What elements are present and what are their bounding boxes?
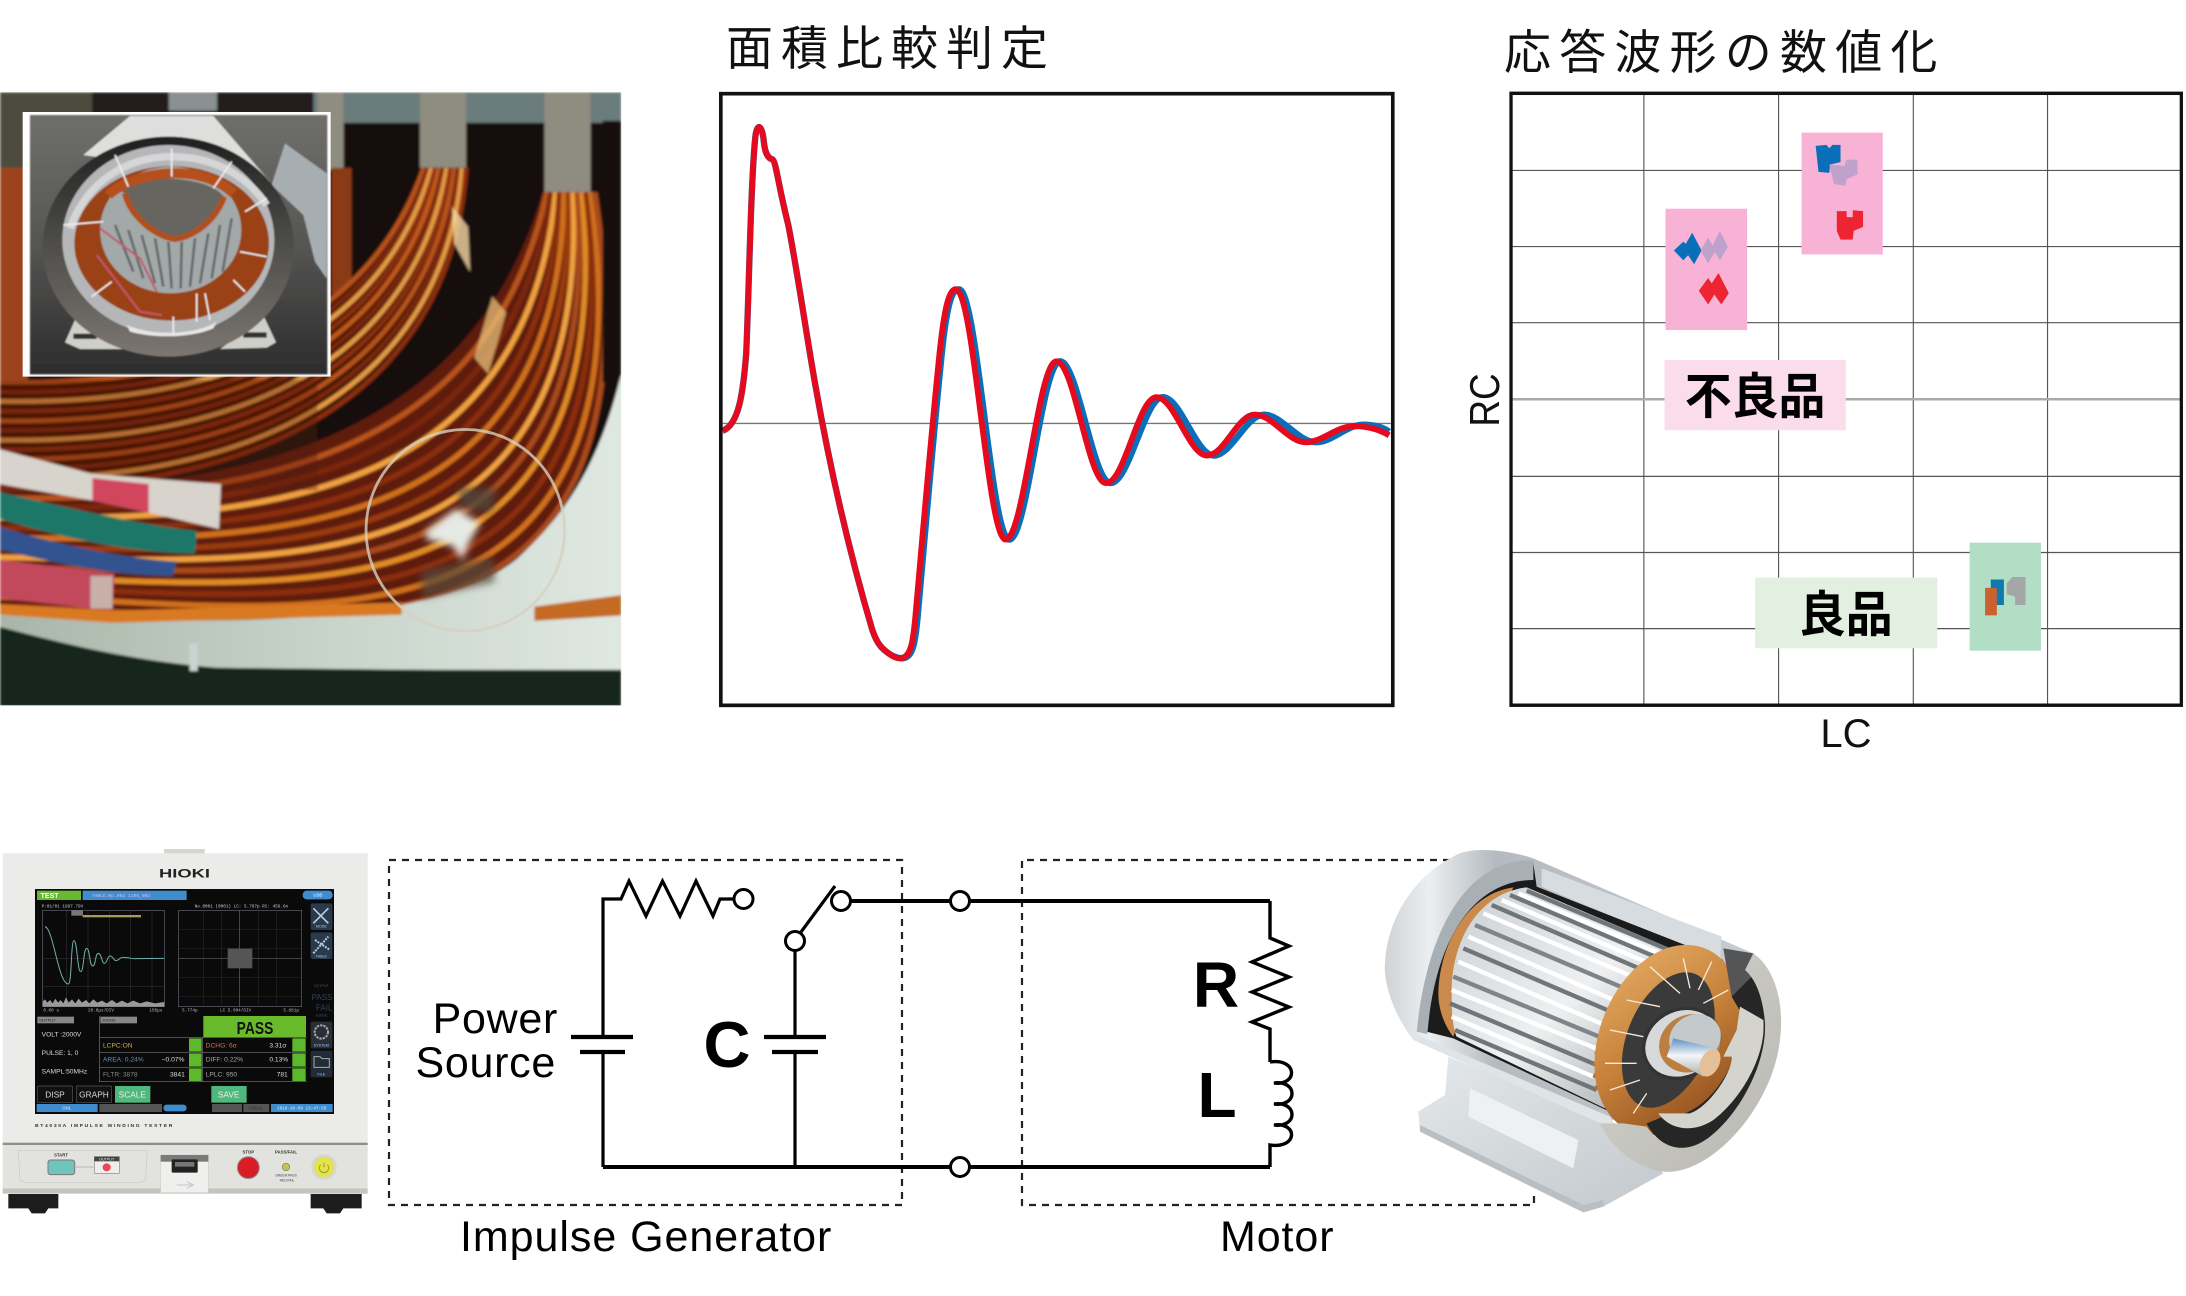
photo: damaged motor winding with inset stator <box>0 92 621 707</box>
label: defective <box>1665 360 1846 430</box>
model label: BT4030A IMPULSE WINDING TESTER <box>35 1123 173 1129</box>
end cap cross-section <box>1600 953 1781 1172</box>
slot teeth <box>1593 957 1678 1093</box>
side buttons: MODE <box>316 925 327 929</box>
screen: No.0001 (0001) LC: 5.787p RC: 456.6n <box>195 905 289 910</box>
screen buttons <box>37 1086 333 1112</box>
screen <box>35 889 334 1114</box>
base foot <box>1418 1057 1663 1212</box>
good cluster <box>1970 543 2041 651</box>
inner housing opening <box>1420 863 1723 1113</box>
side buttons: JUDGE <box>315 1014 328 1018</box>
label: R: R <box>1193 949 1239 1021</box>
side buttons: TABLE <box>316 954 328 958</box>
blue reference waveform <box>723 127 1389 658</box>
defect cluster 2 <box>1802 133 1883 254</box>
label: L: L <box>1197 1059 1237 1131</box>
bearing and shaft <box>1631 995 1732 1092</box>
defect cluster 1 <box>1665 209 1747 330</box>
front panel controls: GREEN:PASS <box>275 1173 297 1177</box>
judgement table: OUTPUT <box>39 1018 56 1023</box>
judgement table: DCHG: 6σ <box>206 1042 237 1049</box>
motor resistance <box>1252 901 1289 1062</box>
screen buttons: SCALE <box>119 1090 146 1100</box>
judgement table: DIFF: 0.22% <box>206 1057 243 1064</box>
motor inductance <box>1270 1062 1292 1167</box>
screen: 150μs <box>149 1009 163 1014</box>
terminals <box>950 892 970 1176</box>
screen buttons: DISP <box>45 1090 65 1100</box>
side buttons: SYSTEM <box>314 1043 329 1047</box>
front copper winding <box>1585 941 1751 1139</box>
judgement table: 3841 <box>170 1072 185 1079</box>
instrument: Hioki BT4030A tester <box>3 849 368 1213</box>
front panel controls: STOP <box>242 1150 254 1155</box>
label: power source: Source <box>416 1039 556 1087</box>
callout circle around the damage <box>366 429 565 631</box>
logo: HIOKI <box>159 868 210 881</box>
judgement table: VOLT :2000V <box>42 1032 82 1039</box>
screen: P:01/01 1987.79V <box>42 905 84 910</box>
heading: area comparison: 面積比較判定 <box>726 22 1056 75</box>
circuit diagram <box>571 881 1292 1176</box>
axis label: RC: RC <box>1462 373 1509 427</box>
dashed box: motor <box>1022 860 1534 1205</box>
housing <box>1385 850 1753 1123</box>
label: C: C <box>704 1008 750 1081</box>
side buttons: PASS <box>312 993 332 1002</box>
judgement table: LCPC:ON <box>103 1042 133 1049</box>
judgement table: SAMPL:50MHz <box>42 1068 87 1075</box>
side buttons: OUTPUT <box>314 984 330 988</box>
side buttons: FAIL <box>316 1004 333 1013</box>
screen: USB <box>313 893 322 898</box>
label: motor: Motor <box>1220 1213 1334 1261</box>
screen buttons: LOCAL <box>249 1106 264 1111</box>
screen: 20.0μs/DIV <box>88 1009 114 1014</box>
dashed box: impulse generator <box>389 860 902 1205</box>
front panel controls: OUTPUT <box>99 1157 115 1161</box>
label: power source <box>416 995 558 1087</box>
stator laminations <box>1450 887 1690 1108</box>
inset photo: stator <box>23 112 331 377</box>
judgement table: −0.07% <box>162 1057 185 1064</box>
label: power source: Power <box>433 995 558 1043</box>
feet <box>8 1194 362 1213</box>
judgement table <box>37 1016 307 1082</box>
screen: 5.881p <box>283 1009 299 1014</box>
dark rear bearing shield <box>1647 970 1767 1149</box>
screen: LC 5.004/DIV <box>220 1009 252 1014</box>
screen buttons: GRAPH <box>79 1090 109 1100</box>
side buttons <box>311 903 333 1077</box>
heading: numeric response waveform: 応答波形の数値化 <box>1504 26 1946 79</box>
judgement table: LPLC: 950 <box>206 1072 237 1079</box>
screen buttons: 2019-10-09 13:47:50 <box>277 1107 327 1112</box>
screen: TEST <box>41 893 59 900</box>
label: defective: 不良品 <box>1685 371 1825 425</box>
judgement table: PASS <box>237 1018 273 1038</box>
screen: 0.00 s <box>43 1009 59 1014</box>
motor cutaway illustration <box>1385 850 1781 1212</box>
red measured waveform <box>723 127 1389 658</box>
judgement table: 781 <box>277 1072 288 1079</box>
charging branch with power source and resistor <box>571 881 753 1167</box>
screen: 5.774p <box>182 1009 198 1014</box>
front panel controls: RED:FAIL <box>280 1178 295 1182</box>
screen scatter plot <box>179 910 302 1007</box>
main wires <box>603 901 1270 1167</box>
chart: LC RC scatter <box>1511 93 2181 705</box>
judgement table: PULSE: 1, 0 <box>42 1050 79 1057</box>
judgement table: 3.31σ <box>269 1042 286 1049</box>
side buttons: FILE <box>317 1073 326 1077</box>
front panel controls: START <box>54 1153 68 1158</box>
front panel controls: PASS/FAIL <box>275 1150 297 1155</box>
judgement table: 0.13% <box>269 1057 288 1064</box>
discharge capacitor branch with switch <box>764 886 850 1167</box>
label: impulse generator: Impulse Generator <box>460 1213 832 1261</box>
axis label: LC: LC <box>1820 712 1872 756</box>
screen waveform plot <box>43 910 164 1007</box>
judgement table: FLTR: 3878 <box>103 1072 138 1079</box>
inner cap crescent <box>1658 1007 1764 1128</box>
judgement table: AREA: 0.24% <box>103 1057 144 1064</box>
label: good: 良品 <box>1799 589 1893 643</box>
damage spot on the winding <box>422 488 498 598</box>
screen buttons: ONL <box>62 1106 72 1111</box>
judgement table: JUDGE <box>102 1018 116 1023</box>
screen buttons: SAVE <box>218 1090 240 1100</box>
screen: TABLE:No.002 1106_002 <box>92 893 151 899</box>
label: good <box>1755 578 1937 648</box>
rear copper winding <box>1438 887 1513 1037</box>
chart: waveform comparison <box>721 94 1393 705</box>
front panel controls <box>18 1150 337 1193</box>
